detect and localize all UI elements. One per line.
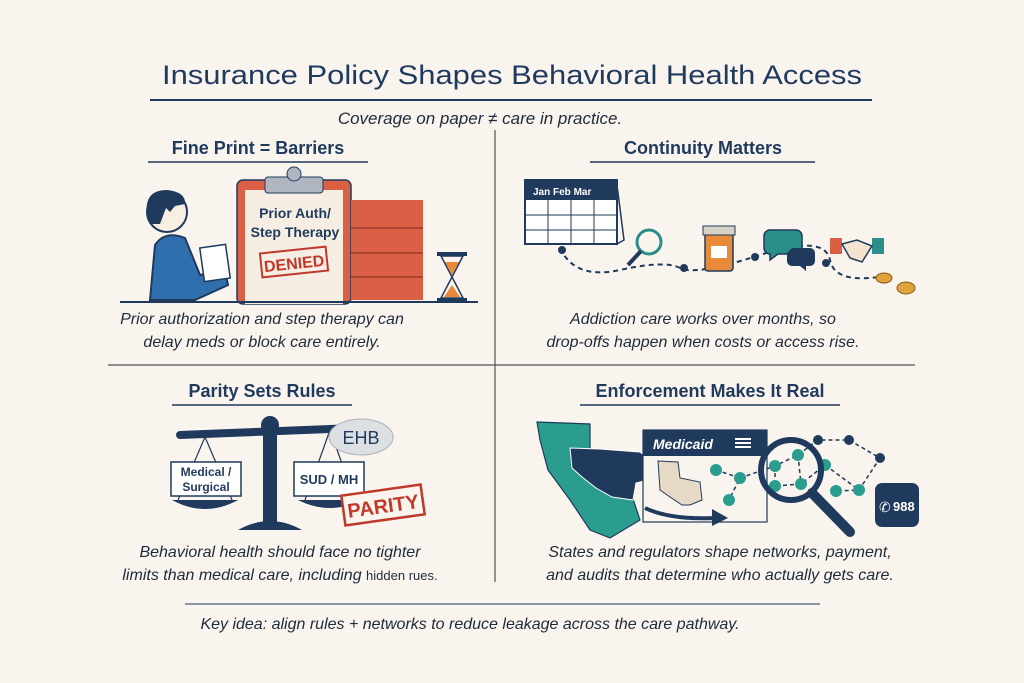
- Medicaid panel: Medicaid: [653, 436, 713, 452]
- icon: chat bubbles: [764, 230, 815, 271]
- caption: Prior authorization and step therapy can: [120, 311, 404, 328]
- icon: EHB badge: EHB: [342, 428, 380, 448]
- caption: drop-offs happen when costs or access rise.: [546, 334, 860, 351]
- icon: calendar: Jan Feb Mar: [533, 187, 591, 198]
- caption: [122, 544, 438, 584]
- subtitle: Coverage on paper ≠ care in practice.: [338, 109, 622, 128]
- icon: pill bottle: [703, 226, 735, 271]
- caption: [546, 544, 894, 584]
- panel: parity: [122, 381, 438, 584]
- icon: 988 phone: 988: [893, 499, 915, 514]
- panel: enforcement: [537, 381, 919, 584]
- heading: Continuity Matters: Continuity Matters: [624, 138, 782, 158]
- icon: 988 phone: ✆: [879, 499, 891, 515]
- Medicaid panel: [643, 430, 767, 522]
- panel: fine print: [120, 138, 478, 351]
- icon: magnifier: [628, 230, 661, 265]
- caption: limits than medical care, including hidden rues.: [122, 567, 438, 584]
- heading: Enforcement Makes It Real: Enforcement Makes It Real: [595, 381, 825, 401]
- heading: Fine Print = Barriers: Fine Print = Barriers: [172, 138, 344, 158]
- icon: handshake and coins: [830, 238, 915, 294]
- caption: delay meds or block care entirely.: [143, 334, 381, 351]
- icon: California map: [537, 422, 640, 538]
- icon: EHB badge: [329, 419, 393, 455]
- key idea: Key idea: align rules + networks to reduce leakage across the care pathway.: [200, 616, 740, 633]
- panel: continuity: [525, 138, 915, 351]
- caption: Addiction care works over months, so: [569, 311, 836, 328]
- icon: red wall: [351, 200, 423, 300]
- caption: Behavioral health should face no tighter: [139, 544, 421, 561]
- icon: clipboard with denied: Prior Auth/: [259, 205, 331, 221]
- icon: 988 phone: [875, 483, 919, 527]
- icon: clipboard with denied: [237, 167, 351, 304]
- icon: calendar: [525, 180, 624, 244]
- stamp: parity: PARITY: [346, 491, 421, 523]
- title: Insurance Policy Shapes Behavioral Health Access: [162, 60, 862, 90]
- caption: States and regulators shape networks, payment,: [548, 544, 892, 561]
- icon: clipboard with denied: Step Therapy: [251, 224, 340, 240]
- stamp: parity: [341, 485, 425, 525]
- caption: [120, 311, 404, 351]
- arrow: [645, 508, 715, 518]
- icon: scale: Medical /: [181, 465, 232, 479]
- icon: clipboard with denied: DENIED: [263, 253, 325, 276]
- icon: person reading: [147, 190, 230, 300]
- heading: Parity Sets Rules: Parity Sets Rules: [188, 381, 336, 401]
- icon: scale: SUD / MH: [300, 472, 358, 487]
- icon: hourglass: [437, 252, 467, 302]
- icon: scale: Surgical: [182, 480, 230, 494]
- caption: [546, 311, 860, 351]
- icon: scale: [171, 416, 364, 530]
- icon: US map: [570, 448, 650, 500]
- dashed path: [560, 246, 890, 278]
- caption: and audits that determine who actually gets care.: [546, 567, 894, 584]
- network + magnifier: [710, 435, 885, 532]
